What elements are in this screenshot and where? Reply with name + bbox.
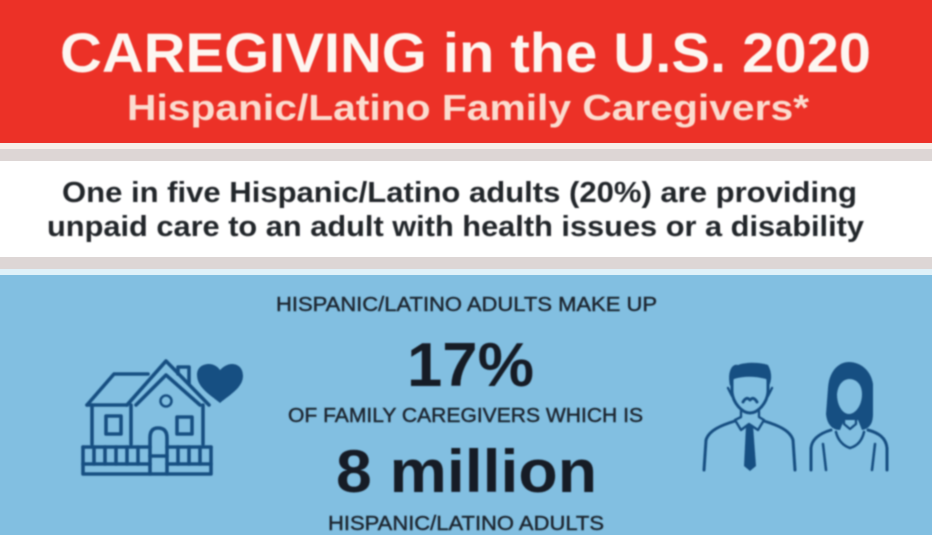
title: CAREGIVING in the U.S. 2020 (60, 21, 871, 84)
label: adults: HISPANIC/LATINO ADULTS (328, 513, 604, 535)
stat: 17%: 17% (407, 331, 534, 400)
subtitle: Hispanic/Latino Family Caregivers* (127, 87, 809, 128)
statement line 1: One in five Hispanic/Latino adults (20%) are providing (62, 177, 857, 209)
stat: 8 million: 8 million (336, 438, 597, 505)
icon: woman (811, 362, 887, 470)
statement line 2: unpaid care to an adult with health issues or a disability (47, 211, 864, 243)
panel: header (0, 0, 932, 143)
icon: man (704, 363, 795, 471)
panel: statistics (0, 275, 932, 535)
panel: statement band (0, 143, 932, 275)
icon: house with heart (83, 361, 243, 474)
label: of family caregivers: OF FAMILY CAREGIVERS WHICH IS (288, 405, 643, 427)
label: adults make up: HISPANIC/LATINO ADULTS MAKE UP (276, 294, 657, 316)
